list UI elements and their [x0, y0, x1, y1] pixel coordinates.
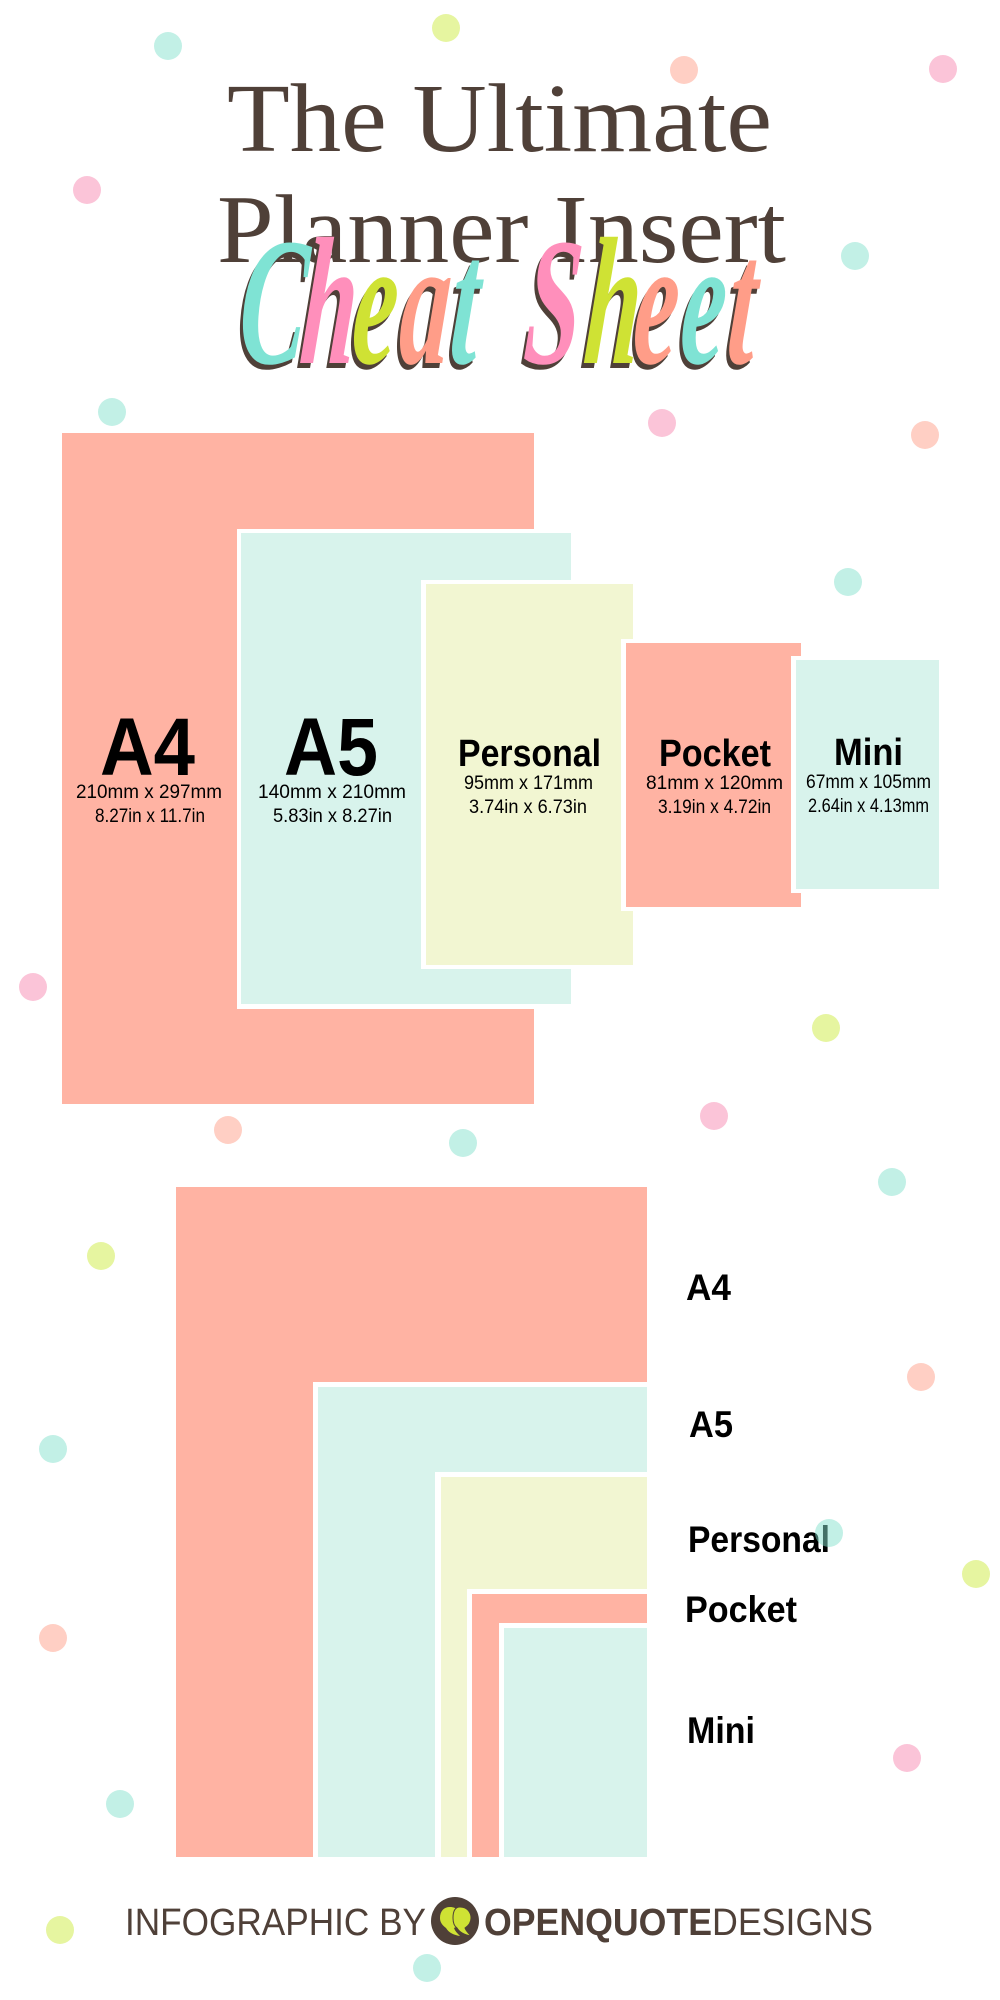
Personal label: 95mm x 171mm — [464, 773, 593, 794]
panel: nested size comparison — [176, 1187, 843, 1857]
footer credit: INFOGRAPHIC BY — [125, 1902, 426, 1944]
Personal sheet — [421, 580, 633, 969]
Pocket label — [646, 733, 783, 818]
nested Personal — [435, 1472, 647, 1857]
A4 label: A4 — [100, 702, 195, 793]
A4 label: 210mm x 297mm — [76, 782, 222, 803]
nested labels: A4 — [686, 1267, 731, 1308]
A4 sheet — [62, 433, 534, 1104]
Mini label: Mini — [834, 732, 903, 774]
nested Mini — [499, 1623, 647, 1857]
script heading: Cheat Sheet: t — [722, 201, 767, 403]
nested labels: Mini — [687, 1710, 755, 1751]
A4 label — [76, 702, 222, 827]
dot overlapping Personal label — [815, 1519, 843, 1547]
nested labels: Personal — [688, 1519, 830, 1560]
Pocket label: 81mm x 120mm — [646, 773, 783, 794]
script heading: Cheat Sheet: e — [675, 201, 734, 403]
script heading: Cheat Sheet: a — [394, 201, 458, 403]
footer credit: DESIGNS — [712, 1902, 873, 1944]
panel: side-by-side size comparison — [62, 433, 939, 1104]
Personal label — [458, 733, 601, 818]
footer credit — [125, 1897, 873, 1945]
nested A5 — [313, 1382, 647, 1857]
Mini label — [806, 732, 931, 817]
Mini label: 67mm x 105mm — [806, 772, 931, 793]
title — [217, 65, 786, 283]
Mini sheet — [791, 656, 939, 893]
nested Pocket — [467, 1589, 647, 1857]
script heading: Cheat Sheet — [234, 201, 767, 403]
footer credit: OPENQUOTE — [484, 1902, 712, 1944]
Pocket label: 3.19in x 4.72in — [658, 797, 771, 818]
script heading: Cheat Sheet: t — [445, 201, 512, 403]
nested A4 — [176, 1187, 647, 1857]
A5 sheet — [237, 529, 571, 1009]
script heading: Cheat Sheet: S — [519, 201, 589, 403]
A5 label: 5.83in x 8.27in — [273, 806, 392, 827]
Mini label: 2.64in x 4.13mm — [808, 796, 929, 817]
A5 label: A5 — [284, 702, 378, 793]
title: The Ultimate — [227, 65, 772, 172]
Pocket sheet — [621, 639, 801, 911]
Pocket label: Pocket — [659, 733, 771, 775]
nested labels: Pocket — [685, 1589, 797, 1630]
icon: Open Quote logo — [431, 1897, 479, 1945]
script heading: Cheat Sheet: h — [579, 201, 649, 403]
Personal label: Personal — [458, 733, 601, 775]
nested labels — [685, 1267, 830, 1751]
A4 label: 8.27in x 11.7in — [95, 806, 205, 827]
A5 label — [258, 702, 406, 827]
nested labels: A5 — [689, 1404, 733, 1445]
script heading: Cheat Sheet: e — [628, 201, 687, 403]
title: Planner Insert — [217, 176, 786, 283]
script heading: Cheat Sheet: C — [234, 201, 316, 403]
script heading: Cheat Sheet: h — [295, 201, 365, 403]
Personal label: 3.74in x 6.73in — [469, 797, 587, 818]
A5 label: 140mm x 210mm — [258, 782, 406, 803]
script heading: Cheat Sheet: e — [347, 201, 406, 403]
